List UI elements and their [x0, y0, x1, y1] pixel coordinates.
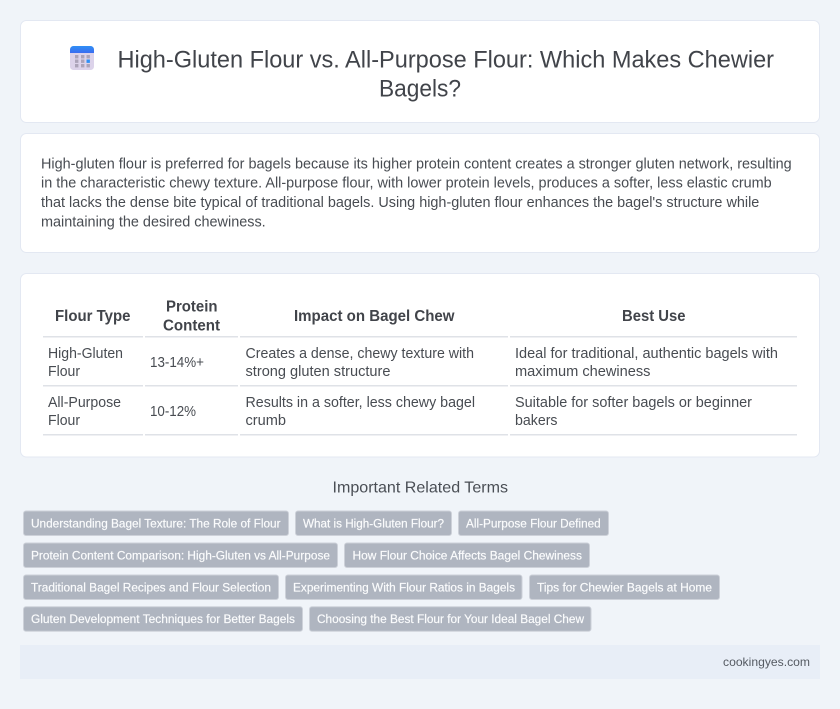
tag: [310, 607, 591, 631]
table header row: Flour Type: [55, 308, 131, 325]
tag: What is High-Gluten Flour?: [303, 516, 444, 530]
table header row: Impact on Bagel Chew: [294, 308, 455, 325]
table row: all-purpose flour: Results in a softer, less chewy bagel: [246, 395, 475, 411]
table row: all-purpose flour: crumb: [246, 413, 286, 429]
text block: introduction: in the characteristic chewy texture. All-purpose flour, with lower protein levels, produces a softer, less elastic crumb: [41, 176, 772, 192]
table row: high-gluten flour: strong gluten structure: [246, 364, 390, 380]
table header row: Content: [163, 318, 221, 334]
table row: all-purpose flour: bakers: [515, 413, 558, 429]
icon: calendar: [70, 46, 94, 70]
table row: high-gluten flour: High-Gluten: [48, 346, 123, 362]
table row: all-purpose flour: 10-12%: [150, 404, 196, 420]
panel: introduction: [20, 134, 820, 252]
tag: Choosing the Best Flour for Your Ideal Bagel Chew: [317, 612, 584, 626]
table header row: Best Use: [622, 308, 686, 325]
tag: [24, 511, 288, 536]
tag: [296, 511, 452, 536]
tag: Understanding Bagel Texture: The Role of Flour: [31, 516, 280, 530]
table row: high-gluten flour: Flour: [48, 364, 80, 380]
tag: [530, 575, 720, 600]
title: High-Gluten Flour vs. All-Purpose Flour: Which Makes Chewier: [118, 46, 774, 74]
panel: comparison table: [20, 274, 820, 457]
text block: introduction: maintaining the desired chewiness.: [41, 214, 266, 230]
footer: cookingyes.com: [723, 655, 810, 669]
table header row: Protein: [166, 299, 218, 316]
table header row: [43, 299, 797, 338]
heading: important related terms: Important Related Terms: [332, 480, 508, 497]
table row: all-purpose flour: [43, 395, 797, 436]
text block: introduction: that lacks the dense bite typical of traditional bagels. Using high-gluten flour enhances the bagel's structure while: [41, 195, 759, 211]
tag: All-Purpose Flour Defined: [466, 516, 601, 530]
tag: [286, 575, 522, 600]
tag: [24, 543, 338, 568]
title: Bagels?: [379, 76, 461, 102]
panel: header: [20, 20, 820, 122]
table row: all-purpose flour: All-Purpose: [48, 395, 121, 411]
tag: [458, 511, 608, 536]
tag: Experimenting With Flour Ratios in Bagels: [293, 580, 515, 594]
tag: Tips for Chewier Bagels at Home: [537, 580, 712, 594]
table row: high-gluten flour: Ideal for traditional, authentic bagels with: [515, 346, 778, 362]
tag: [24, 607, 302, 631]
text block: introduction: High-gluten flour is preferred for bagels because its higher protein content creates a stronger gluten network, resulting: [41, 156, 792, 172]
tag: [344, 543, 590, 568]
text block: introduction: [41, 156, 792, 230]
tag: Traditional Bagel Recipes and Flour Selection: [31, 580, 271, 594]
table row: all-purpose flour: Suitable for softer bagels or beginner: [515, 395, 752, 411]
table row: high-gluten flour: Creates a dense, chewy texture with: [246, 346, 474, 362]
related term tags: [24, 511, 720, 631]
footer: [20, 645, 820, 679]
table row: high-gluten flour: [43, 346, 797, 386]
tag: [24, 575, 278, 600]
title: [118, 46, 774, 102]
table row: high-gluten flour: 13-14%+: [150, 355, 204, 371]
table row: high-gluten flour: maximum chewiness: [515, 364, 650, 380]
tag: Protein Content Comparison: High-Gluten vs All-Purpose: [31, 548, 330, 562]
tag: How Flour Choice Affects Bagel Chewiness: [352, 548, 582, 562]
tag: Gluten Development Techniques for Better Bagels: [31, 612, 295, 626]
table row: all-purpose flour: Flour: [48, 413, 80, 429]
